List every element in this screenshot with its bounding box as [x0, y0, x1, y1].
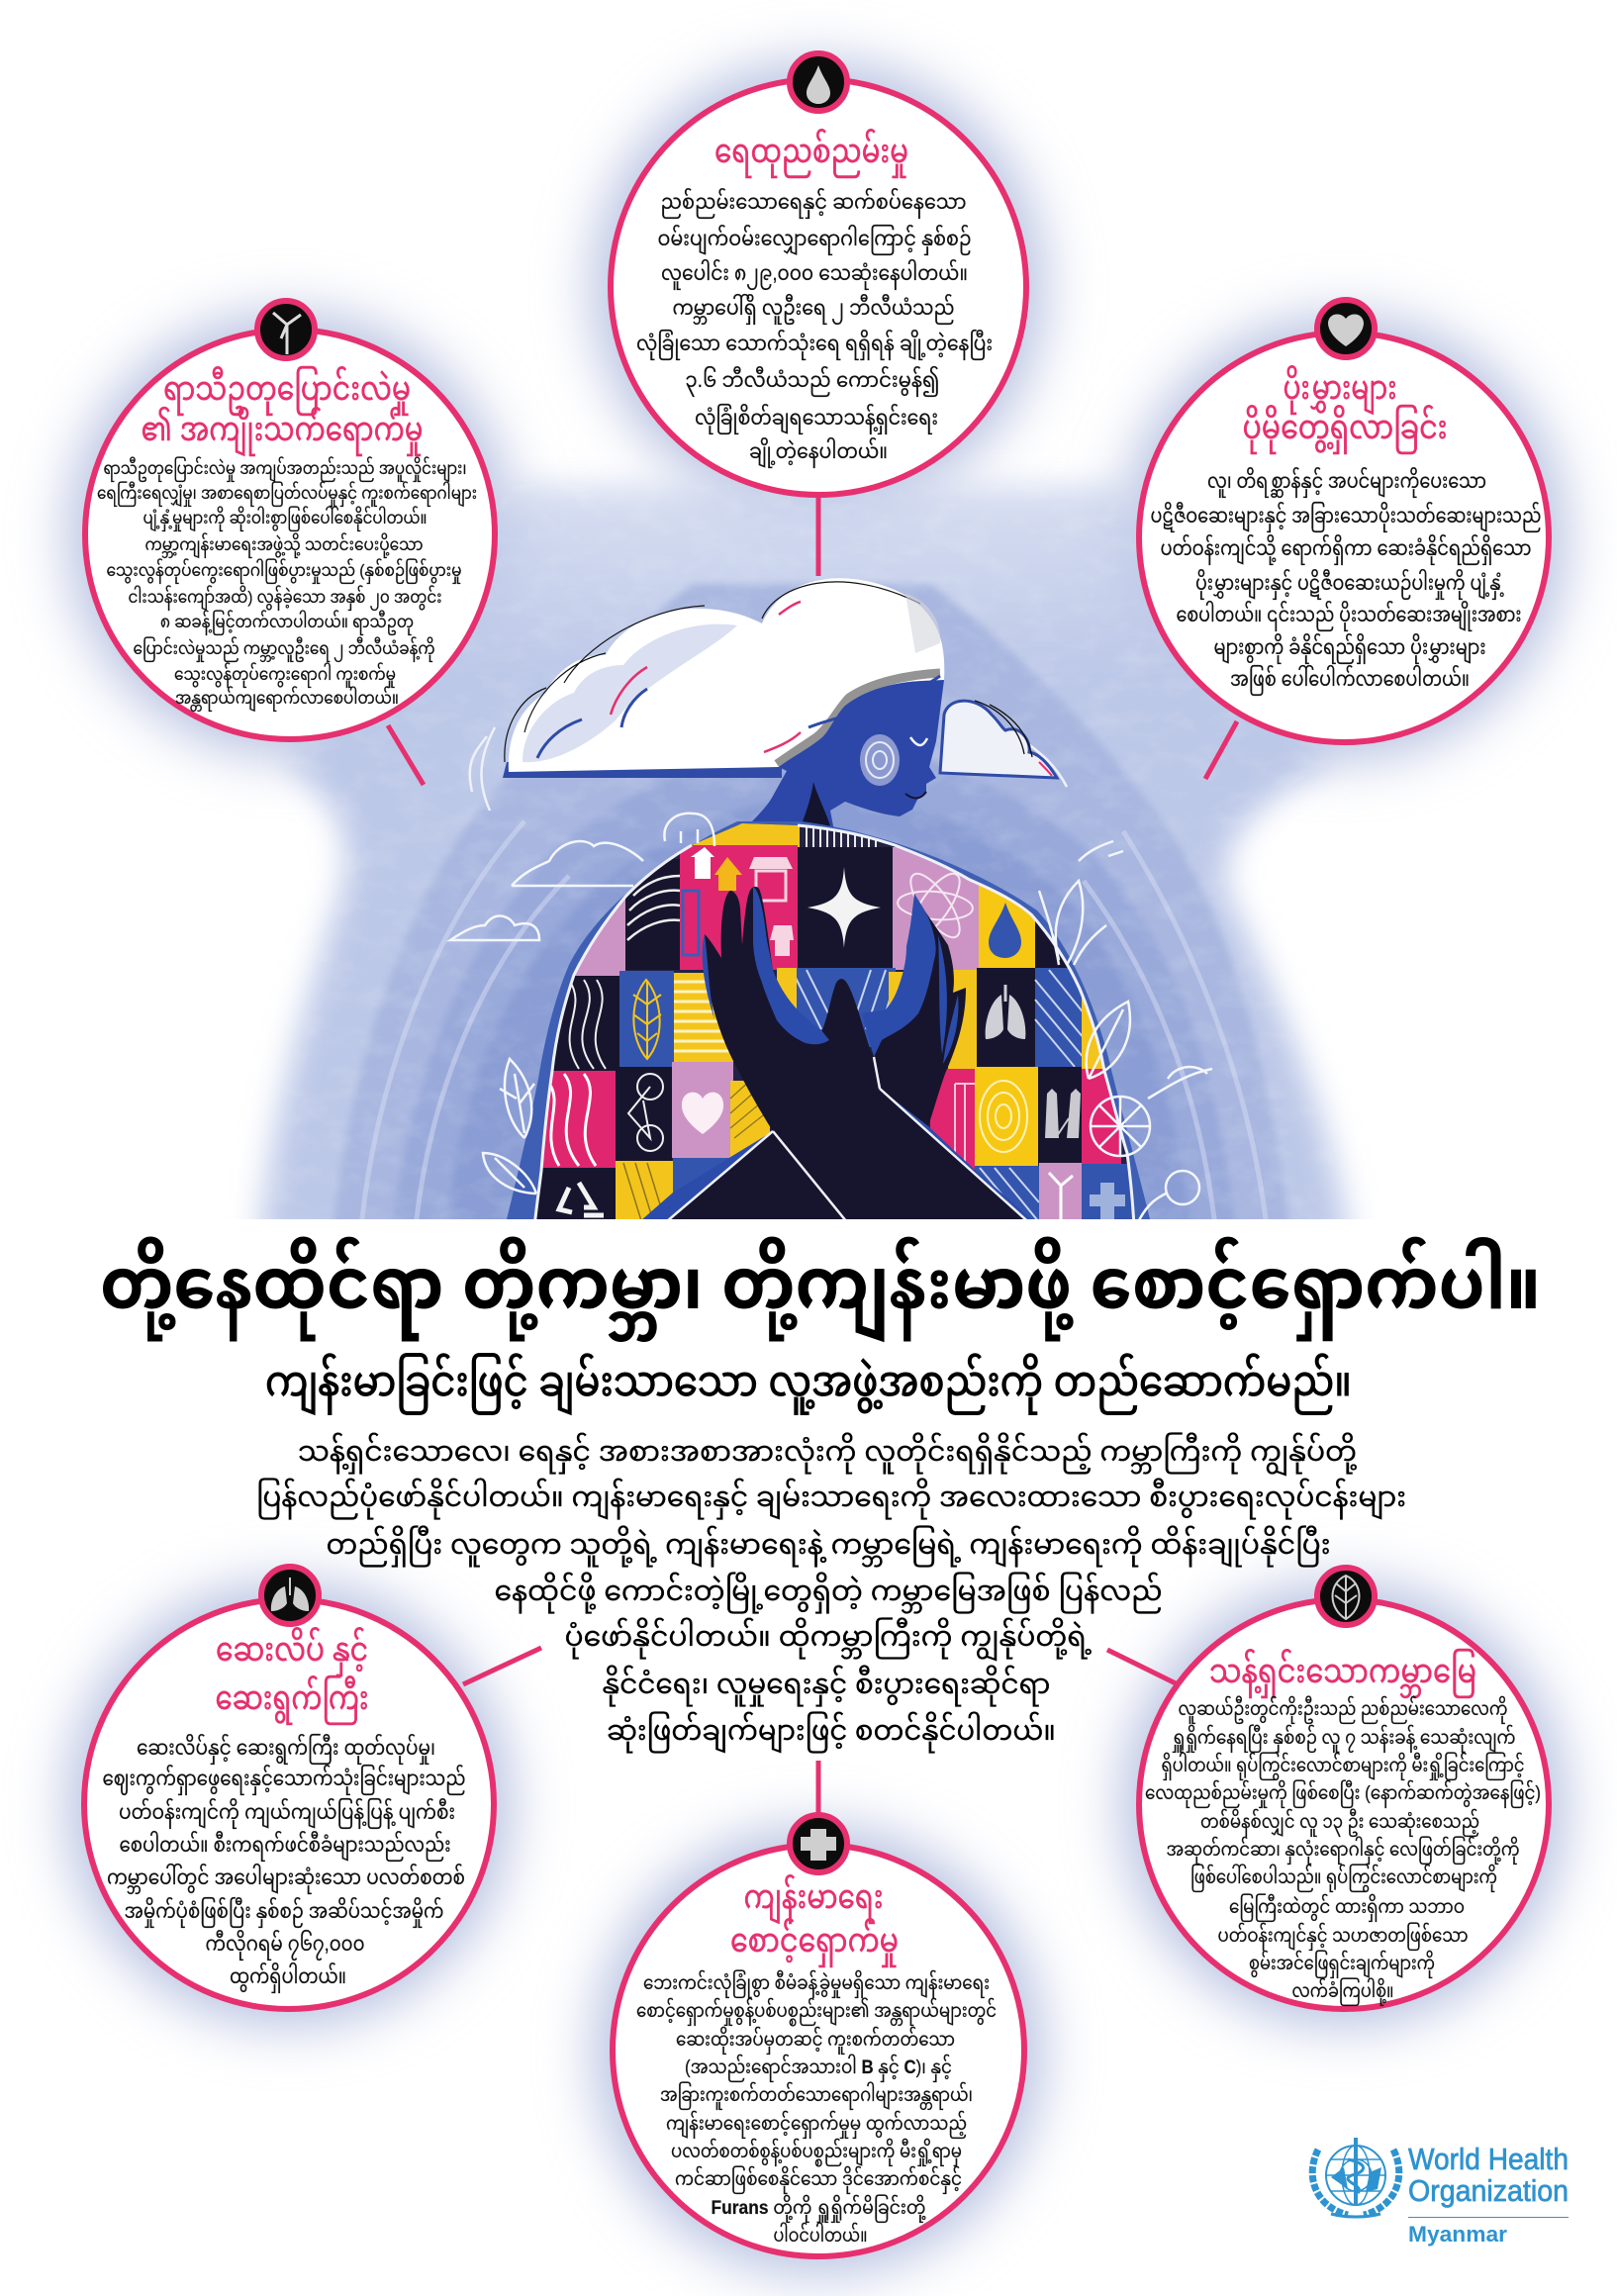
patch: star — [798, 847, 893, 968]
patch: atom — [893, 847, 979, 970]
text block: ပတ်ဝန်းကျင်သို့ ရောက်ရှိကာ ဆေးခံနိုင်ရည်ရှိသော — [1160, 532, 1532, 566]
intro text block: နိုင်ငံရေး၊ လူမှုရေးနှင့် စီးပွားရေးဆိုင်ရာ — [602, 1666, 1051, 1706]
text block: သွေးလွန်တုပ်ကွေးရောဂါဖြစ်ပွားမှုသည် (နှစ်စဉ်ဖြစ်ပွားမှု — [107, 559, 461, 585]
panel: antimicrobial resistance: ပိုမိုတွေ့ရှိလာခြင်း — [1243, 403, 1447, 454]
doodle strokes beside hair — [470, 727, 1067, 811]
patch: blue hatch lower — [975, 1166, 1039, 1227]
panel: health care — [613, 1815, 1024, 2256]
patch: family — [1038, 1067, 1082, 1163]
patch: blue hatch right — [1035, 968, 1089, 1067]
text block: ကမ္ဘာပေါ်ရှိ လူဦးရေ ၂ ဘီလီယံသည် — [673, 292, 954, 325]
text block: ပျံ့နှံ့မှုများကို ဆိုးဝါးစွာဖြစ်ပေါ်စေနိုင်ပါတယ်။ — [143, 507, 428, 532]
text block: ရှူရှိုက်နေရပြီး နှစ်စဉ် လူ ၇ သန်းခန့် သေဆုံးလျက် — [1172, 1723, 1516, 1754]
patch: recycle — [534, 1168, 616, 1227]
text block: အခြားကူးစက်တတ်သောရောဂါများအန္တရာယ်၊ — [660, 2080, 973, 2111]
text block: လုံခြုံစိတ်ချရသောသန့်ရှင်းရေး — [695, 402, 938, 435]
patch: striped shoulder — [806, 827, 877, 847]
white outline of shoulders — [534, 825, 1134, 1227]
text block — [636, 1968, 997, 2247]
blue wash background — [238, 485, 1385, 1247]
patch: black waves — [554, 976, 619, 1071]
text block: ထွက်ရှိပါတယ်။ — [230, 1961, 346, 1993]
arm band and sleeve outline — [505, 821, 1152, 1227]
text block: Furans တို့ကို ရှူရှိုက်မိခြင်းတို့ — [711, 2193, 926, 2224]
panel: tobacco: ဆေးရွက်ကြီး — [216, 1674, 368, 1725]
intro text block: နေထိုင်ဖို့ ကောင်းတဲ့မြို့တွေရှိတဲ့ ကမ္ဘာမြေအဖြစ် ပြန်လည် — [495, 1573, 1162, 1613]
white doodles: clouds, plants, wheel — [450, 813, 1212, 1222]
text block: စွမ်းအင်ဖြေရှင်းချက်များကို — [1249, 1949, 1435, 1979]
face and neck — [742, 680, 944, 831]
text block — [1145, 1694, 1541, 2006]
patch: lungs — [977, 968, 1035, 1069]
quilted body — [536, 823, 1132, 1219]
heading: သန့်ရှင်းသောကမ္ဘာမြေ — [1209, 1647, 1476, 1698]
text block: ပတ်ဝန်းကျင်နှင့် သဟဇာတဖြစ်သော — [1217, 1921, 1469, 1952]
patch: yellow hatch — [616, 1161, 673, 1230]
patch: pink corner — [930, 1069, 975, 1170]
text block: ရာသီဥတုပြောင်းလဲမှု အကျပ်အတည်းသည် အပူလှိုင်းများ၊ — [103, 457, 467, 483]
patch: yellow stripes — [674, 973, 733, 1064]
intro text block: တည်ရှိပြီး လူတွေက သူတို့ရဲ့ ကျန်းမာရေးနဲ့ ကမ္ဘာမြေရဲ့ ကျန်းမာရေးကို ထိန်းချုပ်နိုင်ပြီး — [327, 1526, 1330, 1567]
text block — [103, 1732, 465, 1993]
hair shaped as white cloud — [503, 578, 944, 778]
icon: medical cross — [790, 1815, 847, 1872]
text block: (အသည်းရောင်အသားဝါ B နှင့် C)၊ နှင့် — [685, 2053, 952, 2083]
icon: lungs — [261, 1567, 319, 1624]
intro text block — [256, 1433, 1406, 1753]
text block: လေထုညစ်ညမ်းမှုကို ဖြစ်စေပြီး (နောက်ဆက်တွဲအနေဖြင့်) — [1145, 1778, 1541, 1809]
text block: အဆုတ်ကင်ဆာ၊ နှလုံးရောဂါနှင့် လေဖြတ်ခြင်းတို့ကို — [1166, 1835, 1520, 1866]
icon: wind turbine — [257, 301, 315, 358]
patch: yellow hatch by wrist — [730, 1079, 772, 1158]
panel: health care: စောင့်ရှောက်မှု — [730, 1916, 899, 1967]
text block: စောင့်ရှောက်မှုစွန့်ပစ်ပစ္စည်းများ၏ အန္တရာယ်များတွင် — [636, 1996, 997, 2027]
panel: climate change — [85, 301, 495, 739]
heading: ပိုးမွှားများ — [1283, 364, 1397, 416]
patch: swirl lines — [625, 859, 680, 970]
text block: ကမ္ဘာ့ကျန်းမာရေးအဖွဲ့သို့ သတင်းပေးပို့သော — [144, 533, 424, 558]
intro text block: ပြန်လည်ပုံဖော်နိုင်ပါတယ်။ ကျန်းမာရေးနှင့် ချမ်းသာရေးကို အလေးထားသော စီးပွားရေးလုပ်ငန်းများ — [256, 1479, 1406, 1519]
WHO emblem — [1312, 2138, 1399, 2217]
title: တို့နေထိုင်ရာ တို့ကမ္ဘာ၊ တို့ကျန်းမာဖို့ စောင့်ရှောက်ပါ။ — [100, 1236, 1541, 1343]
text block — [636, 186, 993, 469]
subtitle: ကျန်းမာခြင်းဖြင့် ချမ်းသာသော လူ့အဖွဲ့အစည်းကို တည်ဆောက်မည်။ — [265, 1354, 1352, 1415]
text block: တစ်မိနစ်လျှင် လူ ၁၃ ဦး သေဆုံးစေသည့် — [1200, 1807, 1479, 1838]
WHO Myanmar logo: Organization — [1408, 2173, 1569, 2208]
patch: cross — [1082, 1164, 1136, 1227]
text block: များစွာကို ခံနိုင်ရည်ရှိသော ပိုးမွှားများ — [1213, 631, 1486, 665]
intro text block: ပုံဖော်နိုင်ပါတယ်။ ထိုကမ္ဘာကြီးကို ကျွန်ုပ်တို့ရဲ့ — [564, 1618, 1093, 1661]
text block: ဖြစ်ပေါ်စေပါသည်။ ရုပ်ကြွင်းလောင်စာများကို — [1190, 1863, 1497, 1893]
text block — [1150, 465, 1542, 696]
text block: လူ၊ တိရစ္ဆာန်နှင့် အပင်များကိုပေးသော — [1207, 465, 1486, 499]
text block: အန္တရာယ်ကျရောက်လာစေပါတယ်။ — [175, 687, 399, 712]
text block: သွေးလွန်တုပ်ကွေးရောဂါ ကူးစက်မှု — [174, 663, 396, 689]
intro text block: ဆုံးဖြတ်ချက်များဖြင့် စတင်နိုင်ပါတယ်။ — [607, 1712, 1056, 1753]
connector lines — [388, 495, 1237, 1817]
text block: ပိုးမွှားများနှင့် ပဋိဇီဝဆေးယဉ်ပါးမှုကို ပျံ့နှံ့ — [1195, 567, 1504, 601]
patch: leaf — [619, 971, 674, 1067]
patch: turbine — [1039, 1163, 1082, 1227]
panel: water pollution — [611, 53, 1026, 495]
text block: ဆေးလိပ်နှင့် ဆေးရွက်ကြီး ထုတ်လုပ်မှု၊ — [137, 1732, 435, 1765]
heading: ဆေးလိပ် နှင့် — [216, 1625, 368, 1676]
WHO Myanmar logo — [1312, 2138, 1569, 2247]
panel: climate change: ၏ အကျိုးသက်ရောက်မှု — [141, 405, 424, 457]
text block: လူပေါင်း ၈၂၉,၀၀၀ သေဆုံးနေပါတယ်။ — [661, 257, 968, 290]
patch: pink waves — [539, 1071, 616, 1168]
text block: ဆေးထိုးအပ်မှတဆင့် ကူးစက်တတ်သော — [676, 2025, 955, 2056]
heading: ရေထုညစ်ညမ်းမှု — [714, 127, 908, 178]
illustration: woman wrapped in quilted earth — [238, 485, 1385, 1247]
panel: tobacco — [84, 1567, 494, 2009]
text block: ပတ်ဝန်းကျင်ကို ကျယ်ကျယ်ပြန့်ပြန့် ပျက်စီး — [119, 1796, 455, 1830]
icon: leaf — [1317, 1568, 1375, 1625]
text block: စေပါတယ်။ ၎င်းသည် ပိုးသတ်ဆေးအမျိုးအစား — [1176, 599, 1522, 632]
WHO Myanmar logo: Myanmar — [1408, 2222, 1507, 2247]
text block: လူဆယ်ဦးတွင်ကိုးဦးသည် ညစ်ညမ်းသောလေကို — [1178, 1694, 1508, 1725]
panel: antimicrobial resistance — [1139, 300, 1549, 742]
text block: ကင်ဆာဖြစ်စေနိုင်သော ဒိုင်အောက်စင်နှင့် — [675, 2164, 962, 2195]
patch: blue hatch centre — [797, 968, 896, 1047]
WHO wordmark: World Health — [1408, 2142, 1569, 2176]
icon: heart — [1317, 300, 1375, 357]
text block: လုံခြုံသော သောက်သုံးရေ ရရှိရန် ချို့တဲ့နေပြီး — [636, 328, 993, 361]
patch: lilac — [575, 899, 625, 976]
text block: လက်ခံကြပါစို့။ — [1292, 1976, 1393, 2006]
text block: ဘေးကင်းလုံခြုံစွာ စီမံခန့်ခွဲမှုမရှိသော ကျန်းမာရေး — [643, 1968, 990, 1999]
text block: စေပါတယ်။ စီးကရက်ဖင်စီခံများသည်လည်း — [119, 1829, 451, 1863]
heading: ကျန်းမာရေး — [744, 1872, 883, 1925]
crossed hands — [633, 887, 1041, 1227]
patch: heart — [672, 1062, 733, 1158]
text block: ရှိပါတယ်။ ရုပ်ကြွင်းလောင်စာများကို မီးရှို့ခြင်းကြောင့် — [1162, 1751, 1524, 1781]
text block: အဖြစ် ပေါ်ပေါက်လာစေပါတယ်။ — [1230, 663, 1470, 696]
text block: ကမ္ဘာပေါ်တွင် အပေါများဆုံးသော ပလတ်စတစ် — [107, 1862, 465, 1895]
text block: ပလတ်စတစ်စွန့်ပစ်ပစ္စည်းများကို မီးရှို့ရာမှ — [671, 2137, 962, 2167]
text block: ကျန်းမာရေးစောင့်ရှောက်မှုမှ ထွက်လာသည့် — [666, 2109, 967, 2140]
text block: ညစ်ညမ်းသောရေနှင့် ဆက်စပ်နေသော — [661, 186, 966, 219]
icon: water drop — [790, 53, 847, 111]
text block: ပါဝင်ပါတယ်။ — [774, 2221, 867, 2247]
patch: bicycle — [616, 1067, 672, 1161]
text block: ငါးသန်းကျော်အထိ) လွန်ခဲ့သော အနှစ် ၂၀ အတွင်း — [129, 586, 441, 612]
text block: ဝမ်းပျက်ဝမ်းလျှောရောဂါကြောင့် နှစ်စဉ် — [657, 223, 972, 256]
text block: ပဋိဇီဝဆေးများနှင့် အခြားသောပိုးသတ်ဆေးများသည် — [1150, 500, 1542, 533]
text block: ဈေးကွက်ရှာဖွေရေးနှင့်သောက်သုံးခြင်းများသည် — [103, 1763, 465, 1796]
text block: မြေကြီးထဲတွင် ထားရှိကာ သဘာဝ — [1229, 1892, 1465, 1923]
panel: clean air — [1139, 1568, 1549, 2009]
text block: ၈ ဆခန့်မြင့်တက်လာပါတယ်။ ရာသီဥတု — [160, 611, 414, 636]
patch: drop — [979, 885, 1035, 968]
text block: အမှိုက်ပုံစံဖြစ်ပြီး နှစ်စဉ် အဆိပ်သင့်အမှိုက် — [125, 1895, 443, 1928]
text block: ၃.၆ ဘီလီယံသည် ကောင်းမွန်၍ — [685, 364, 940, 397]
heading: ရာသီဥတုပြောင်းလဲမှု — [163, 364, 411, 416]
right small cloud — [940, 701, 1057, 778]
patch: houses — [680, 845, 798, 970]
patch: yellow shoulder — [692, 823, 800, 847]
text block: ရေကြီးရေလျှံမှု၊ အစာရေစာပြတ်လပ်မှုနှင့် ကူးစက်ရောဂါများ — [97, 482, 477, 508]
text block: ချို့တဲ့နေပါတယ်။ — [749, 435, 888, 469]
text block — [97, 457, 477, 712]
patch: spiral — [975, 1067, 1038, 1168]
text block: ပြောင်းလဲမှုသည် ကမ္ဘာ့လူဦးရေ ၂ ဘီလီယံခန့်ကို — [133, 637, 435, 663]
intro text block: သန့်ရှင်းသောလေ၊ ရေနှင့် အစားအစာအားလုံးကို လူတိုင်းရရှိနိုင်သည့် ကမ္ဘာကြီးကို ကျွန်ုပ်တို့ — [298, 1433, 1357, 1476]
text block: ကီလိုဂရမ် ၇၆၇,၀၀၀ — [206, 1928, 364, 1961]
